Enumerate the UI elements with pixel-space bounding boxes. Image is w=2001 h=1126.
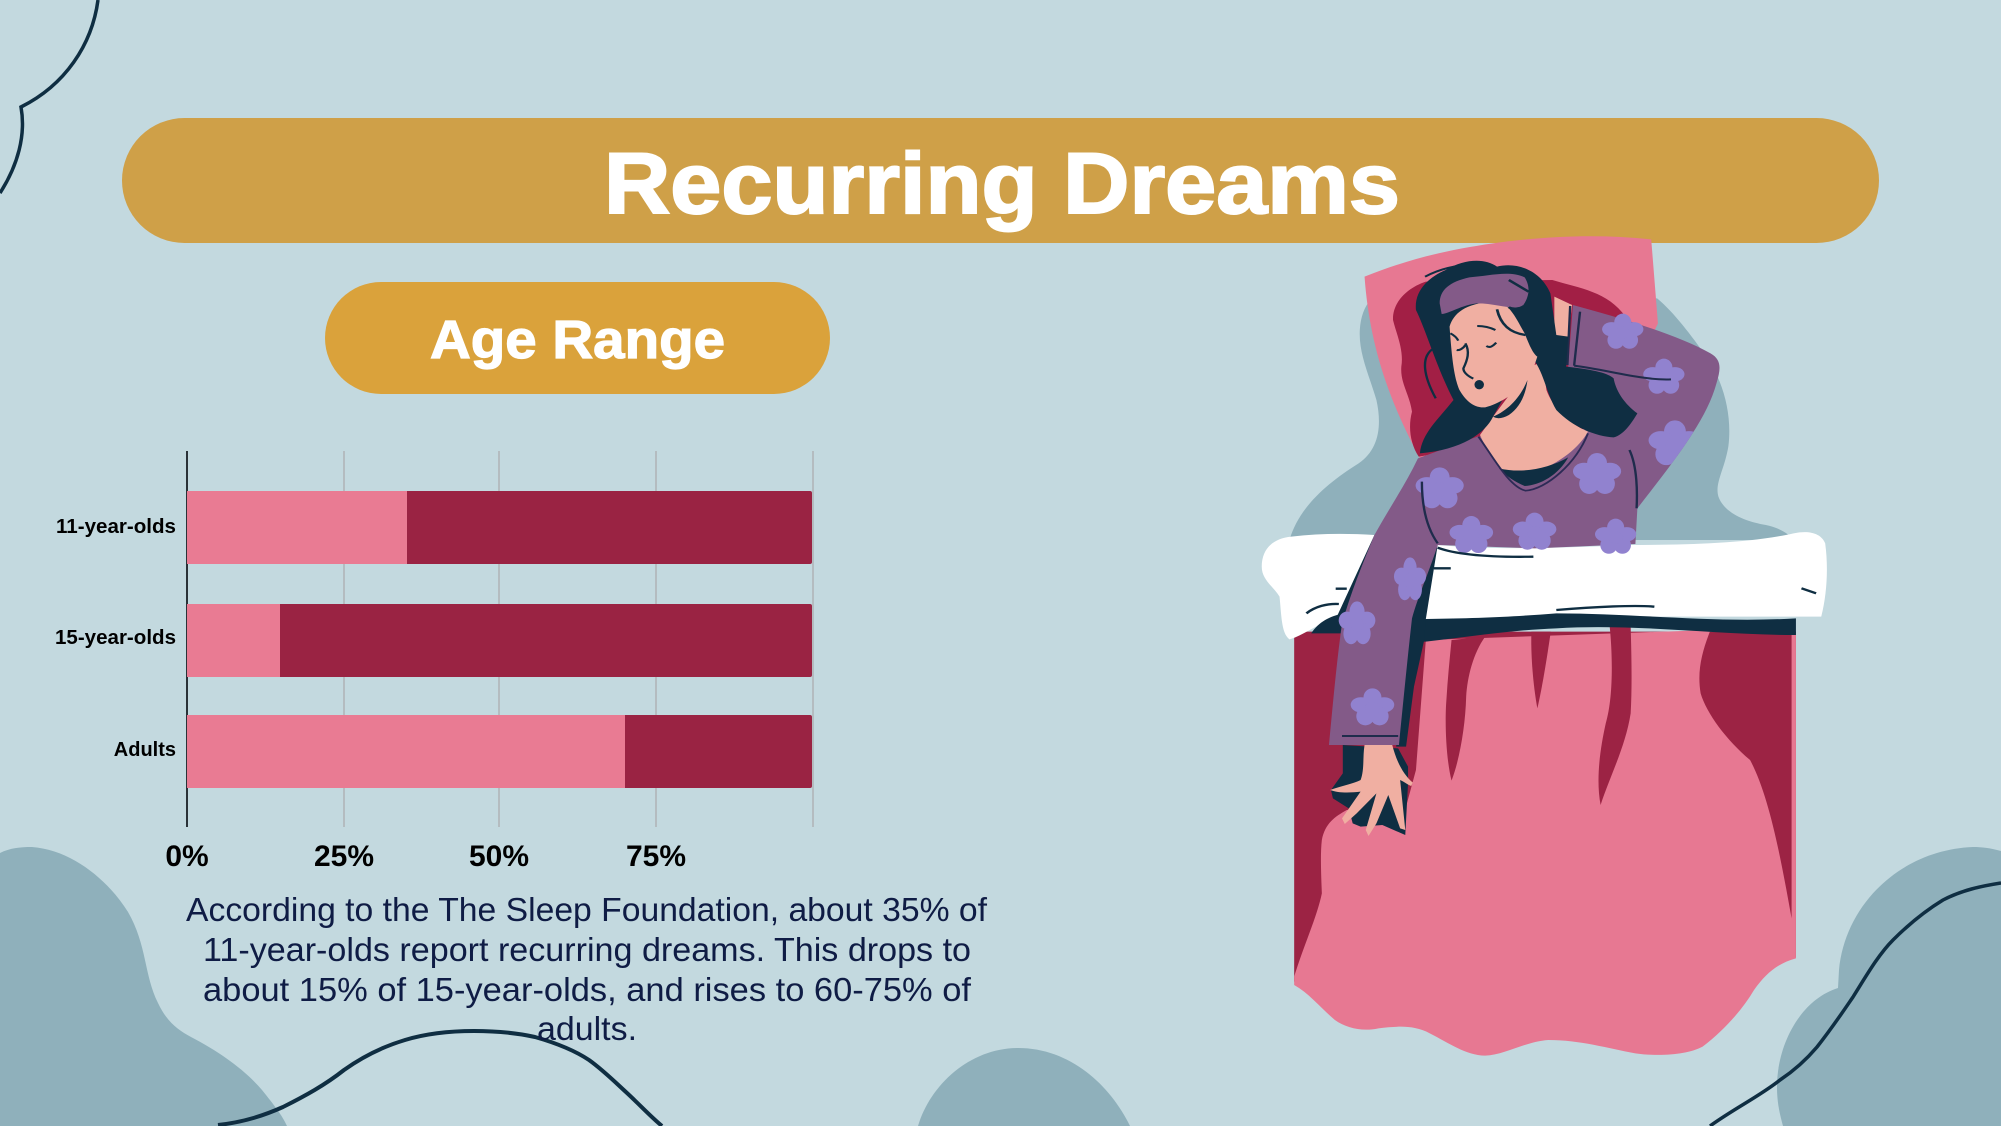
hand	[1330, 745, 1413, 836]
section pill label: Age Range	[430, 310, 725, 370]
category labels: Adults	[114, 739, 176, 761]
section pill: Age Range	[325, 282, 830, 394]
undershirt	[1499, 457, 1568, 486]
category labels: 11-year-olds	[56, 516, 176, 538]
category labels: 15-year-olds	[55, 627, 176, 649]
decorative blob: bottom right	[1777, 847, 2001, 1126]
front hair strand	[1497, 280, 1529, 335]
pyjama neckline	[1478, 433, 1588, 491]
body and raised arm	[1329, 297, 1720, 747]
hair shadow on pillow	[1393, 280, 1653, 457]
axis labels: 25%	[314, 840, 374, 873]
axis labels: 50%	[469, 840, 529, 873]
axis labels: 75%	[626, 840, 686, 873]
paragraph text: 11-year-olds report recurring dreams. This drops to	[203, 931, 971, 968]
blanket navy band	[1311, 613, 1796, 642]
paragraph text: According to the The Sleep Foundation, about 35% of	[186, 891, 988, 928]
blanket fold	[1262, 532, 1827, 639]
pyjama top	[1329, 305, 1720, 745]
chin shadow	[1493, 380, 1527, 418]
duvet folds	[1446, 627, 1632, 805]
decorative curve: top left	[0, 0, 98, 193]
paragraph text	[186, 891, 988, 1047]
blanket creases	[1306, 548, 1816, 613]
decorative curve: bottom right	[1710, 883, 2001, 1126]
navy strips beside hanging arm	[1337, 535, 1438, 747]
wrist behind head	[1554, 297, 1572, 337]
hair	[1416, 261, 1637, 453]
pyjama seam lines	[1342, 306, 1671, 736]
duvet	[1294, 630, 1796, 1056]
decorative blob: bottom centre	[918, 1048, 1130, 1126]
title banner	[122, 118, 1879, 243]
hand skin	[1330, 745, 1413, 836]
title text: Recurring Dreams	[604, 136, 1400, 232]
bar: Adults	[187, 715, 812, 788]
teal blob behind figure	[1289, 298, 1794, 540]
bed base	[1294, 632, 1796, 982]
flowers: pyjama pattern	[1339, 314, 1701, 725]
paragraph text: about 15% of 15-year-olds, and rises to 60-75% of	[203, 971, 972, 1008]
bar: 15-year-olds	[187, 604, 812, 677]
axis labels	[165, 840, 686, 873]
paragraph text: adults.	[537, 1010, 637, 1047]
neck and chest	[1480, 362, 1588, 473]
hair stray strands	[1425, 265, 1473, 398]
decorative curve: bottom wave line	[218, 1031, 662, 1126]
eye mask	[1440, 274, 1529, 314]
hand shadow	[1331, 745, 1408, 835]
axis labels: 0%	[165, 840, 209, 873]
category labels	[55, 516, 176, 761]
bar: 11-year-olds	[187, 491, 812, 564]
face	[1450, 302, 1537, 407]
stacked bar chart: age range	[55, 451, 813, 873]
pillow	[1365, 236, 1658, 458]
facial features	[1450, 326, 1496, 389]
illustration: woman sleeping in bed	[1262, 236, 1827, 1056]
decorative blob: bottom left	[0, 847, 287, 1126]
